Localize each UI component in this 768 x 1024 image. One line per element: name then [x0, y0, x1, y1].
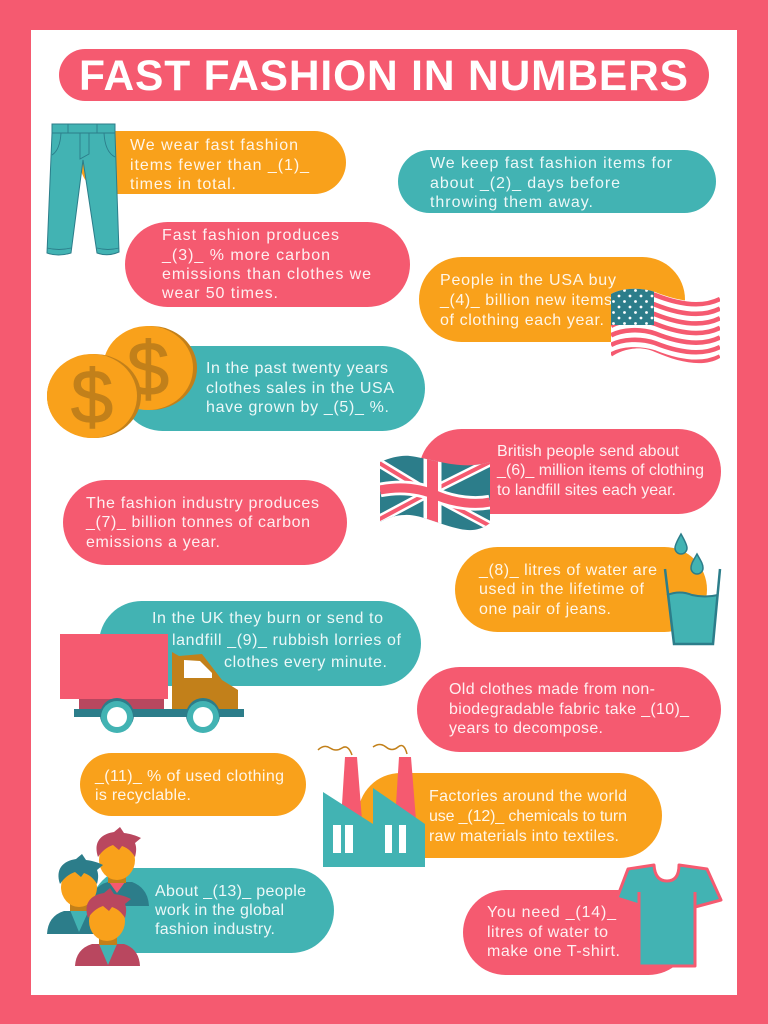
icon: coins [47, 326, 197, 440]
stat 2 text: throwing them away. [430, 194, 593, 211]
stat 6 text: British people send about [497, 443, 680, 460]
stat 13 text: fashion industry. [155, 921, 275, 938]
stat 4 bubble [419, 257, 685, 342]
stat 10 text: Old clothes made from non- [449, 681, 655, 698]
stat 12 text: raw materials into textiles. [429, 828, 619, 845]
stat 12 text: use _(12)_ chemicals to turn [429, 808, 627, 825]
stat 3 text: Fast fashion produces [162, 227, 339, 244]
stat 8 text: one pair of jeans. [479, 601, 611, 618]
icon: T-shirt [617, 865, 721, 966]
stat 4 text: People in the USA buy [440, 272, 616, 289]
stat 11 text [94, 768, 284, 804]
stat 10 text: biodegradable fabric take _(10)_ [449, 701, 690, 718]
icon: jeans [47, 124, 119, 255]
stat 13 text: work in the global [154, 902, 284, 919]
stat 12 bubble [358, 773, 662, 858]
stat 7 text: The fashion industry produces [86, 495, 319, 512]
stat 3 text: emissions than clothes we [162, 266, 371, 283]
person: back [90, 827, 149, 906]
stat 4 text: _(4)_ billion new items [439, 292, 612, 309]
stat 13 bubble [90, 868, 334, 953]
stat 1 text [130, 137, 310, 193]
icon: factory [318, 744, 425, 867]
stat 9 text: clothes every minute. [224, 654, 387, 671]
stat 11 text: _(11)_ % of used clothing [94, 768, 284, 785]
icon: USA flag [611, 288, 720, 364]
icon: UK flag [380, 456, 490, 530]
icon: glass of water with drops [665, 534, 720, 644]
stat 5 text [206, 360, 394, 416]
stat 14 bubble [463, 890, 691, 975]
stat 3 bubble [125, 222, 410, 307]
stat 1 text: items fewer than _(1)_ [130, 157, 310, 174]
stat 10 text [449, 681, 690, 737]
stat 1 text: We wear fast fashion [130, 137, 298, 154]
person: front [75, 888, 140, 966]
stat 5 text: clothes sales in the USA [206, 380, 394, 397]
stat 9 text: landfill _(9)_ rubbish lorries of [172, 632, 402, 649]
stat 8 text [478, 562, 657, 618]
stat 3 text: _(3)_ % more carbon [161, 247, 330, 264]
icon: three people [47, 827, 149, 966]
stat 6 text: _(6)_ million items of clothing [496, 462, 704, 479]
stat 2 bubble [398, 150, 716, 213]
stat 6 bubble [419, 429, 721, 514]
stat 12 text [429, 788, 627, 845]
stat 8 text: used in the lifetime of [479, 581, 645, 598]
stat 7 bubble [63, 480, 347, 565]
stat 9 text [152, 610, 402, 671]
stat 8 text: _(8)_ litres of water are [478, 562, 657, 579]
stat 1 text: times in total. [130, 176, 236, 193]
stat 2 text [430, 155, 673, 211]
stat 4 text: of clothing each year. [440, 312, 604, 329]
stat 11 bubble [80, 753, 306, 816]
person: left [47, 854, 108, 934]
stat 11 text: is recyclable. [95, 787, 191, 804]
stat 10 bubble [417, 667, 721, 752]
stat 13 text [154, 883, 306, 938]
stat 2 text: about _(2)_ days before [430, 175, 620, 192]
icon: lorry [60, 634, 244, 733]
stat 10 text: years to decompose. [449, 720, 603, 737]
stat 2 text: We keep fast fashion items for [430, 155, 673, 172]
stat 14 text [487, 904, 620, 960]
stat 3 text [161, 227, 371, 302]
stat 4 text [439, 272, 616, 329]
icon: coins: $ [127, 327, 169, 412]
stat 14 text: make one T-shirt. [487, 943, 620, 960]
stat 12 text: Factories around the world [429, 788, 627, 805]
stat 5 text: In the past twenty years [206, 360, 388, 377]
stat 3 text: wear 50 times. [161, 285, 278, 302]
stat 1 bubble [80, 131, 346, 194]
stat 5 text: have grown by _(5)_ %. [206, 399, 389, 416]
stat 5 bubble [120, 346, 425, 431]
icon: coins: $ [71, 355, 113, 440]
stat 6 text [496, 443, 704, 499]
stat 13 text: About _(13)_ people [155, 883, 306, 900]
stat 14 text: You need _(14)_ [487, 904, 617, 921]
stat 6 text: to landfill sites each year. [497, 482, 676, 499]
stat 7 text: emissions a year. [86, 534, 220, 551]
stat 9 bubble [99, 601, 421, 686]
stat 7 text: _(7)_ billion tonnes of carbon [85, 514, 310, 531]
title: FAST FASHION IN NUMBERS [79, 53, 688, 100]
stat 7 text [85, 495, 319, 551]
stat 14 text: litres of water to [487, 924, 608, 941]
stat 8 bubble [455, 547, 707, 632]
stat 9 text: In the UK they burn or send to [152, 610, 383, 627]
